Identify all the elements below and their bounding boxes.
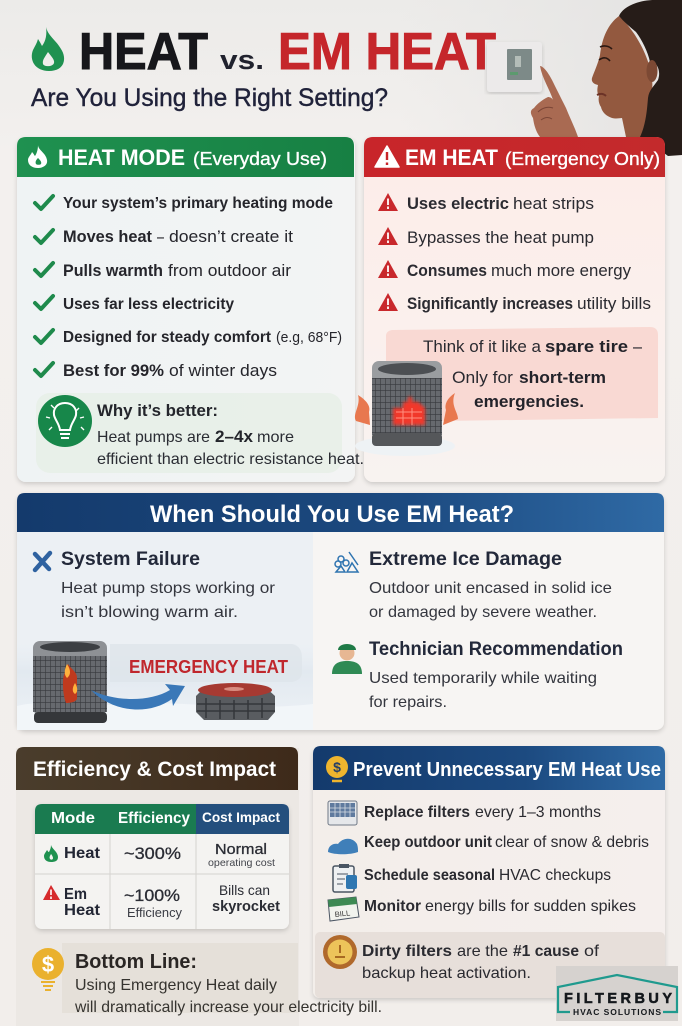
checklist: Your system’s primary heating mode [63,195,333,212]
warning list: Significantly increases [407,294,573,313]
item: technician recommendation [332,639,623,711]
callout: why it's better: 2–4x [215,427,254,446]
header: em heat: (Emergency Only) [505,149,660,169]
tips: every 1–3 months [475,804,601,821]
tips [328,801,649,921]
icon: ice [335,552,358,572]
callout: dirty filters: backup heat activation. [362,965,531,982]
header: Efficiency & Cost Impact [33,758,276,781]
callout: spare tire: emergencies. [474,392,584,411]
header: heat mode: (Everyday Use) [193,149,327,169]
illustration: emergency heat [17,640,313,730]
logo: filterbuy hvac solutions [556,966,678,1021]
checklist: (e.g, 68°F) [276,329,342,346]
icon: warning triangle [375,146,399,167]
tips: Replace filters [364,804,470,821]
callout: spare tire: spare tire [545,337,628,356]
item: extreme ice damage: Extreme Ice Damage [369,549,562,570]
icon: filter [328,801,357,825]
callout: bottom line: Bottom Line: [75,951,197,973]
tips: energy bills for sudden spikes [425,898,636,915]
icon: lightbulb [38,395,92,447]
callout: spare tire: Only for [452,368,513,387]
tips: Keep outdoor unit [364,834,493,851]
callout: dirty filters: #1 cause [513,943,579,960]
checklist: doesn’t create it [169,227,293,246]
icon: bulb: $ [333,759,341,775]
item: extreme ice damage: or damaged by severe weather. [369,604,597,621]
callout: spare tire: short-term [519,368,606,387]
warning list: Uses electric [407,194,509,213]
callout: spare tire: – [633,337,643,356]
hand [531,66,578,137]
checklist: of winter days [169,361,277,380]
checklist: Best for 99% [63,361,164,380]
tips: HVAC checkups [499,867,611,884]
icon: technician [332,644,362,674]
item: technician recommendation: Technician Recommendation [369,639,623,660]
comparison table: Efficiency [118,810,190,827]
icon: bill [328,897,359,921]
item: extreme ice damage: Outdoor unit encased in solid ice [369,580,612,597]
row: heat: operating cost [208,857,275,869]
arrow [91,684,185,710]
panel: efficiency and cost impact [16,747,382,1026]
row: em heat: Efficiency [127,906,183,920]
item: technician recommendation: Used temporarily while waiting [369,670,597,687]
panel: prevent unnecessary em heat use [313,746,665,998]
callout: spare tire: Think of it like a [423,337,542,356]
title: HEAT vs. EM HEAT: HEAT [79,23,208,81]
warning list: Consumes [407,261,487,280]
row: heat: Normal [215,841,267,858]
callout: dirty filters: Dirty filters [362,943,452,960]
checklist: Designed for steady comfort [63,329,272,346]
row: heat: ~300% [124,844,181,863]
comparison table: Mode [51,810,95,827]
callout: why it's better: more [257,429,294,446]
callout: dirty filters: are the [457,943,508,960]
row: em heat [43,882,280,920]
header: em heat [364,137,665,177]
panel: when should you use em heat [17,493,664,730]
row: em heat: skyrocket [212,898,280,915]
heating glow [393,397,425,425]
icon: warning [43,885,60,900]
callout: dirty filters [315,932,665,998]
item: system failure: isn’t blowing warm air. [61,604,238,621]
outdoor unit [33,641,107,723]
logo: filterbuy hvac solutions: HVAC SOLUTIONS [573,1007,661,1017]
icon: coin [323,935,357,969]
checklist: from outdoor air [168,261,291,280]
item: system failure: Heat pump stops working or [61,580,276,597]
row: heat: Heat [64,845,100,862]
checklist: Pulls warmth [63,261,163,280]
icon: flame [44,845,58,862]
comparison table: Cost Impact [202,809,280,825]
callout: why it's better [36,393,364,473]
row: em heat: Heat [64,902,100,919]
callout: bottom line [32,943,382,1016]
row: em heat: Em [64,886,87,903]
callout: why it's better: Why it’s better: [97,401,218,420]
callout: bottom line: will dramatically increase your electricity bill. [74,999,382,1016]
warning list: heat strips [513,194,594,213]
callout: dirty filters: of [584,943,600,960]
tips: Monitor [364,898,421,915]
icon: clipboard [333,864,357,892]
comparison table [35,804,289,929]
header [16,747,298,790]
title: HEAT vs. EM HEAT [32,23,496,81]
row: heat [44,841,275,869]
face [592,16,652,137]
subtitle: Are You Using the Right Setting? [31,84,388,112]
item: system failure: System Failure [61,549,200,570]
row: em heat: Bills can [219,882,270,898]
header: Prevent Unnecessary EM Heat Use [353,759,661,781]
row: em heat: ~100% [124,886,180,905]
callout: why it's better: efficient than electric resistance heat. [97,451,364,468]
checklist [35,195,342,380]
title: HEAT vs. EM HEAT: EM HEAT [278,23,496,81]
item: system failure [35,549,276,621]
header banner: When Should You Use EM Heat? [150,501,514,528]
title: HEAT vs. EM HEAT: vs. [220,45,264,75]
icon: bulb [326,756,348,781]
checklist: – [157,227,164,246]
callout: why it's better: Heat pumps are [97,429,210,446]
icon: thermostat [487,42,542,92]
item: extreme ice damage [335,549,612,621]
warning list: Bypasses the heat pump [407,228,594,247]
illustration: hot outdoor unit in snow [355,361,458,456]
warning icons [378,193,398,311]
callout: bottom line: Using Emergency Heat daily [75,977,277,994]
icon: dollar bulb [32,948,64,990]
hair [619,0,682,156]
illustration: emergency heat: EMERGENCY HEAT [129,657,288,677]
header: heat mode: HEAT MODE [58,145,185,170]
icon: dollar bulb: $ [42,952,54,977]
illustration: woman pressing thermostat [487,0,682,156]
icon: snowy cloud [328,839,358,854]
ear [646,60,658,82]
warning list: utility bills [577,294,651,313]
icon: green flame [32,27,64,71]
icon: tools [35,553,50,570]
header: em heat: EM HEAT [405,145,499,170]
warning list: much more energy [491,261,631,280]
warning list [378,193,651,313]
panel: em heat [355,137,665,482]
callout: spare tire [386,327,658,422]
icon: white flame [28,145,47,168]
tips: clear of snow & debris [495,834,649,851]
frozen unit [196,683,275,720]
panel: heat mode [17,137,364,482]
header: heat mode [17,137,354,177]
logo: filterbuy hvac solutions: FILTERBUY [564,991,672,1007]
tips: Schedule seasonal [364,867,495,884]
item: technician recommendation: for repairs. [369,694,447,711]
checklist: Uses far less electricity [63,296,234,313]
checklist: Moves heat [63,227,152,246]
icon: bill: BILL [334,908,351,919]
check icons [35,196,53,376]
header banner [17,493,664,532]
header [313,746,665,790]
